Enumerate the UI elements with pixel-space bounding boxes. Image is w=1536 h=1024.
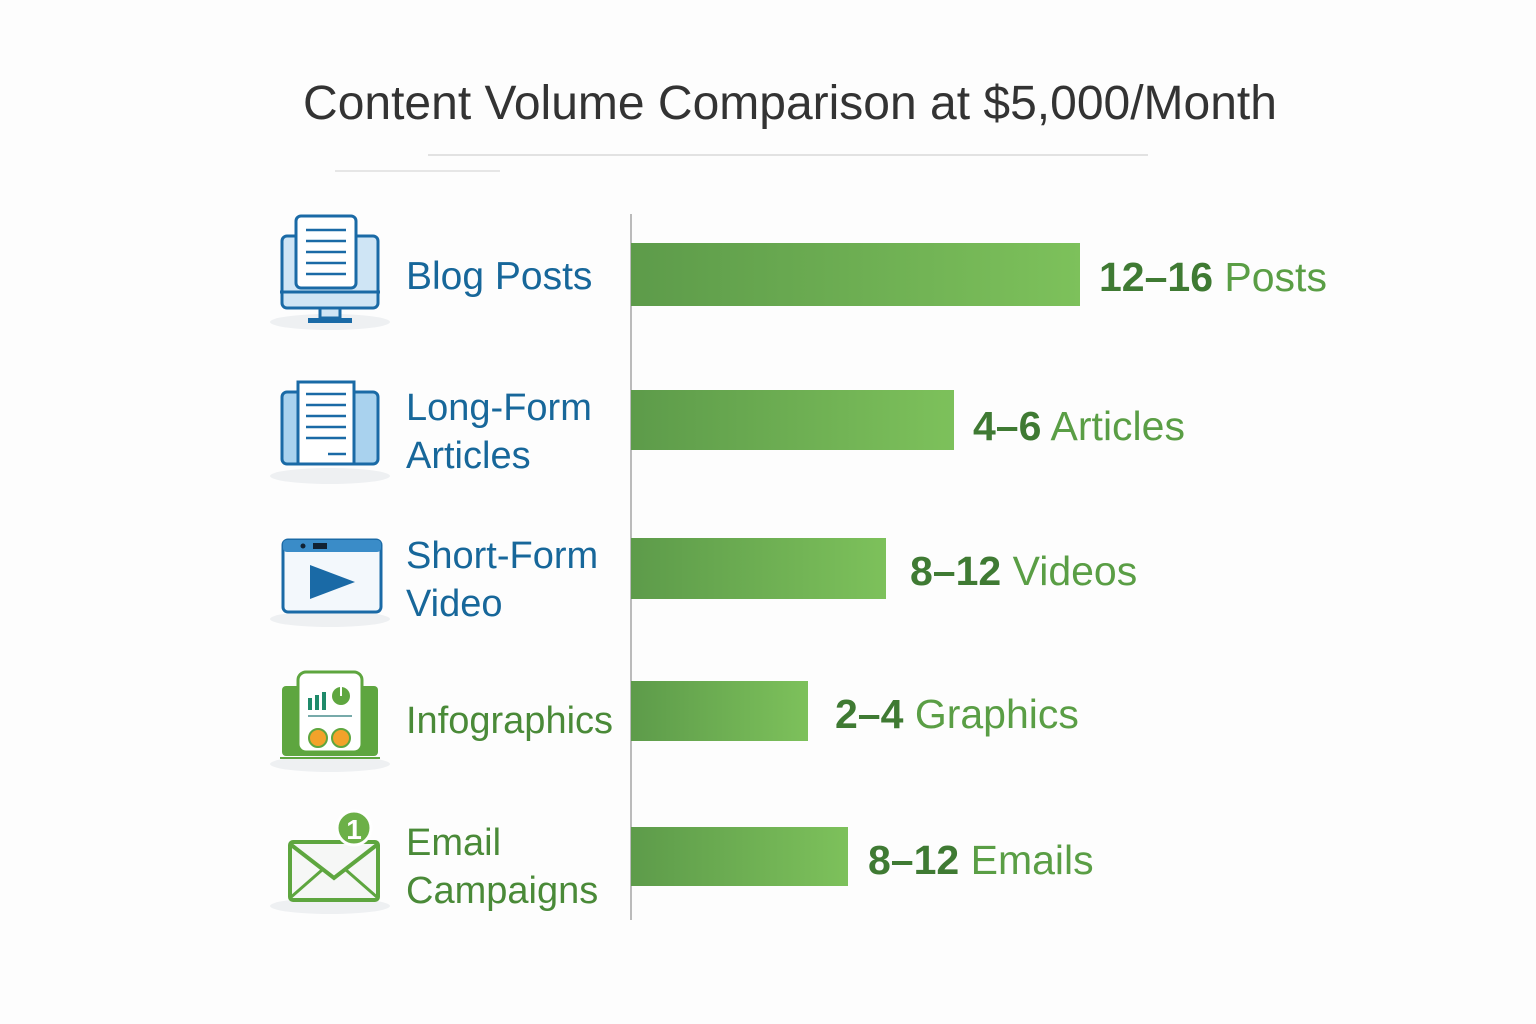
bar: infographics	[631, 681, 808, 741]
icon: video	[270, 538, 390, 627]
label: infographics: Infographics	[406, 700, 613, 742]
bar: blog posts	[631, 243, 1080, 306]
label: long-form articles: Long-Form	[406, 387, 592, 429]
label: long-form articles	[406, 387, 592, 477]
value: infographics: 2–4 Graphics	[835, 691, 1079, 737]
label: email campaigns: Email	[406, 822, 501, 864]
label: long-form articles: Articles	[406, 435, 531, 477]
axis line	[630, 214, 632, 920]
label: email campaigns	[406, 822, 598, 912]
icon: blog monitor	[270, 214, 390, 330]
bar: video	[631, 538, 886, 599]
value: email: 8–12 Emails	[868, 837, 1094, 883]
value: video: 8–12 Videos	[910, 548, 1137, 594]
title: Content Volume Comparison at $5,000/Month	[303, 77, 1277, 130]
bar: email	[631, 827, 848, 886]
icon: infographics	[270, 670, 390, 772]
icon: articles	[270, 380, 390, 484]
icon: email	[270, 812, 390, 914]
value: articles: 4–6 Articles	[973, 403, 1185, 449]
label: short-form video: Video	[406, 583, 503, 625]
label: short-form video	[406, 535, 598, 625]
bar: articles	[631, 390, 954, 450]
icon: email: 1	[346, 814, 362, 845]
label: short-form video: Short-Form	[406, 535, 598, 577]
label: blog posts: Blog Posts	[406, 255, 592, 298]
label: email campaigns: Campaigns	[406, 870, 598, 912]
value: blog posts: 12–16 Posts	[1099, 254, 1327, 300]
